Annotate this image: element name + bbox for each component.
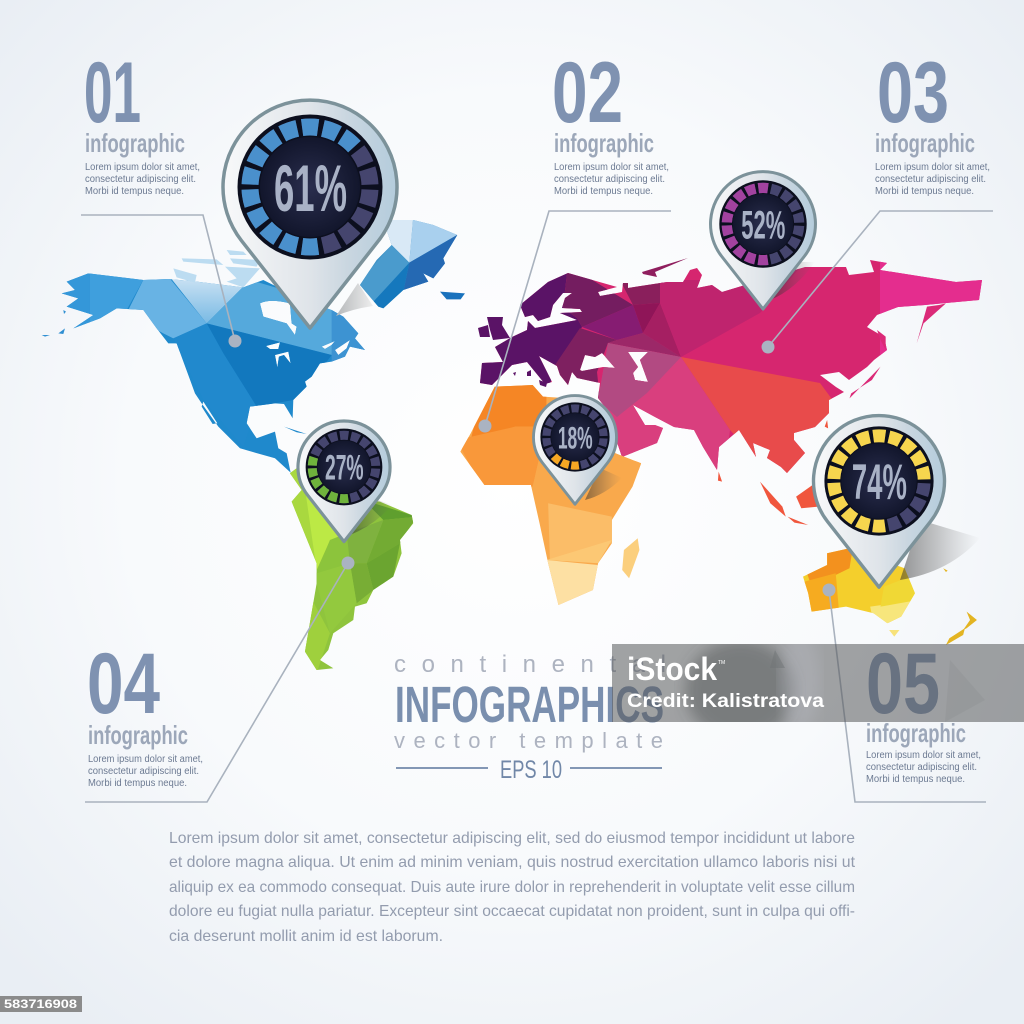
leader lines and dots: [81, 211, 993, 802]
island: novaya zemlya: [642, 258, 688, 277]
callout 01: consectetur adipiscing elit.: [85, 174, 196, 185]
world map: [42, 217, 1000, 673]
body paragraph: et dolore magna aliqua. Ut enim ad minim veniam, quis nostrud exercitation ullamco laboris nisi ut: [169, 854, 856, 871]
stock id tag: [0, 996, 82, 1012]
pin: 52 percent: [711, 172, 815, 309]
title block: continental: [394, 651, 666, 678]
continent: north america: [42, 217, 465, 480]
body paragraph: [169, 830, 856, 945]
callout 03: infographic: [875, 128, 975, 158]
callout 02: 02: [552, 45, 623, 141]
body paragraph: Lorem ipsum dolor sit amet, consectetur adipiscing elit, sed do eiusmod tempor incididunt ut labore: [169, 830, 855, 847]
callout 02: Morbi id tempus neque.: [554, 186, 653, 197]
callout 03: Lorem ipsum dolor sit amet,: [875, 162, 990, 173]
callout 02: consectetur adipiscing elit.: [554, 174, 665, 185]
callout 01: [84, 45, 200, 197]
callout 04: Lorem ipsum dolor sit amet,: [88, 754, 203, 765]
callout 02: Lorem ipsum dolor sit amet,: [554, 162, 669, 173]
pin shadows: [336, 262, 980, 580]
watermark band: Credit: Kalistratova: [627, 691, 824, 712]
callout 03: [875, 45, 990, 197]
callout 04: Morbi id tempus neque.: [88, 778, 187, 789]
title block: [394, 651, 666, 784]
pin: 27 percent: [298, 421, 390, 542]
callout 03: 03: [877, 45, 949, 141]
island: iceland: [440, 292, 465, 299]
watermark band: TM: [718, 660, 725, 666]
callout 02: [552, 45, 669, 197]
island: tasmania: [889, 630, 899, 637]
callout 05: consectetur adipiscing elit.: [866, 762, 977, 773]
title block: vector template: [394, 728, 663, 753]
callout 01: Morbi id tempus neque.: [85, 186, 184, 197]
callout 05: 05: [866, 636, 940, 732]
callout 05: Lorem ipsum dolor sit amet,: [866, 750, 981, 761]
islands: southeast asia: [718, 420, 828, 525]
stock id tag: 583716908: [4, 997, 77, 1011]
body paragraph: aliquip ex ea commodo consequat. Duis aute irure dolor in reprehenderit in voluptate velit esse cillum: [169, 879, 855, 896]
continent: south america: [287, 467, 420, 673]
callout 04: 04: [87, 636, 160, 732]
islands: arctic: [173, 250, 260, 287]
island: cuba: [284, 427, 307, 434]
pin: 61 percent: [223, 100, 397, 328]
callout 02: infographic: [554, 128, 654, 158]
watermark band: iStock: [627, 651, 717, 687]
island: greenland: [360, 220, 458, 308]
callout 05: infographic: [866, 718, 966, 748]
watermark band: [612, 644, 1024, 722]
callout 05: Morbi id tempus neque.: [866, 774, 965, 785]
continent: eurasia: [470, 250, 1000, 525]
callout 04: consectetur adipiscing elit.: [88, 766, 199, 777]
island: madagascar: [622, 538, 639, 578]
pin: 18 percent: 18%: [558, 420, 593, 455]
islands: japan and kamchatka: [850, 303, 946, 398]
body paragraph: cia deserunt mollit anim id est laborum.: [169, 928, 443, 945]
callout 04: [87, 636, 203, 789]
callout 03: consectetur adipiscing elit.: [875, 174, 986, 185]
continent: australia: [798, 543, 977, 645]
title block: EPS 10: [500, 756, 562, 784]
callout 03: Morbi id tempus neque.: [875, 186, 974, 197]
callout 01: 01: [84, 45, 141, 141]
pin: 52 percent: 52%: [741, 203, 785, 247]
continent: africa: [457, 383, 646, 610]
island: uk: [478, 317, 547, 387]
pin: 61 percent: 61%: [274, 151, 347, 225]
island: alaska chain: [42, 310, 66, 337]
body paragraph: dolore eu fugiat nulla pariatur. Excepteur sint occaecat cupidatat non proident, sunt in culpa qui offi-: [169, 903, 855, 920]
callout 01: infographic: [85, 128, 185, 158]
pin: 27 percent: 27%: [325, 449, 364, 488]
pin: 74 percent: 74%: [852, 454, 907, 510]
island: new zealand: [943, 568, 977, 645]
callout 01: Lorem ipsum dolor sit amet,: [85, 162, 200, 173]
title block: INFOGRAPHICS: [395, 676, 664, 733]
callout 05: [866, 636, 981, 785]
pin: 18 percent: [534, 396, 616, 504]
pin: 74 percent: [813, 416, 945, 587]
callout 04: infographic: [88, 720, 188, 750]
